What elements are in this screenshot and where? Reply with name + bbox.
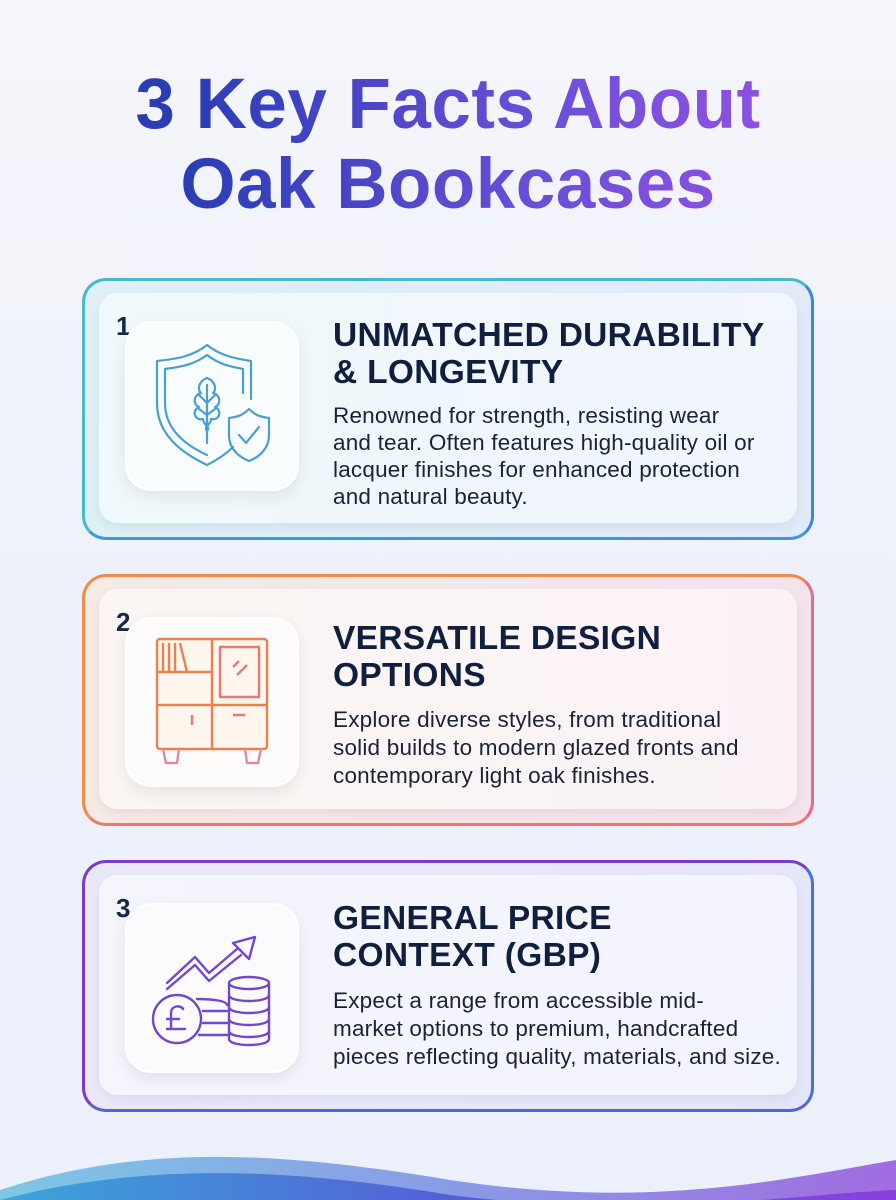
title [0, 65, 896, 225]
heading: VERSATILE DESIGN [333, 620, 661, 657]
text: and natural beauty. [333, 484, 528, 509]
heading [333, 620, 661, 694]
text: market options to premium, handcrafted [333, 1016, 738, 1041]
heading: OPTIONS [333, 657, 486, 694]
text: solid builds to modern glazed fronts and [333, 735, 739, 760]
number 1: 1 [116, 311, 130, 341]
heading [333, 900, 612, 974]
heading: UNMATCHED DURABILITY [333, 317, 765, 354]
text: pieces reflecting quality, materials, and size. [333, 1044, 781, 1069]
icon: pound coins with rising arrow [125, 903, 299, 1073]
heading [333, 317, 765, 391]
heading: CONTEXT (GBP) [333, 937, 601, 974]
panel: design [82, 574, 814, 826]
number 2: 2 [116, 607, 130, 637]
panel: durability [82, 278, 814, 540]
text: Renowned for strength, resisting wear [333, 403, 719, 428]
heading: & LONGEVITY [333, 354, 563, 391]
number 3: 3 [116, 893, 130, 923]
text [333, 988, 781, 1069]
icon: shield with leaf [125, 321, 299, 491]
title: 3 Key Facts About [135, 65, 761, 144]
icon: bookcase [125, 617, 299, 787]
text: Expect a range from accessible mid- [333, 988, 704, 1013]
title: Oak Bookcases [180, 145, 716, 224]
text [333, 707, 739, 788]
panel: price [82, 860, 814, 1112]
heading: GENERAL PRICE [333, 900, 612, 937]
text: Explore diverse styles, from traditional [333, 707, 721, 732]
text: and tear. Often features high-quality oil or [333, 430, 755, 455]
text [333, 403, 755, 509]
text: contemporary light oak finishes. [333, 763, 656, 788]
text: lacquer finishes for enhanced protection [333, 457, 740, 482]
wave: bottom decoration [0, 1156, 896, 1200]
